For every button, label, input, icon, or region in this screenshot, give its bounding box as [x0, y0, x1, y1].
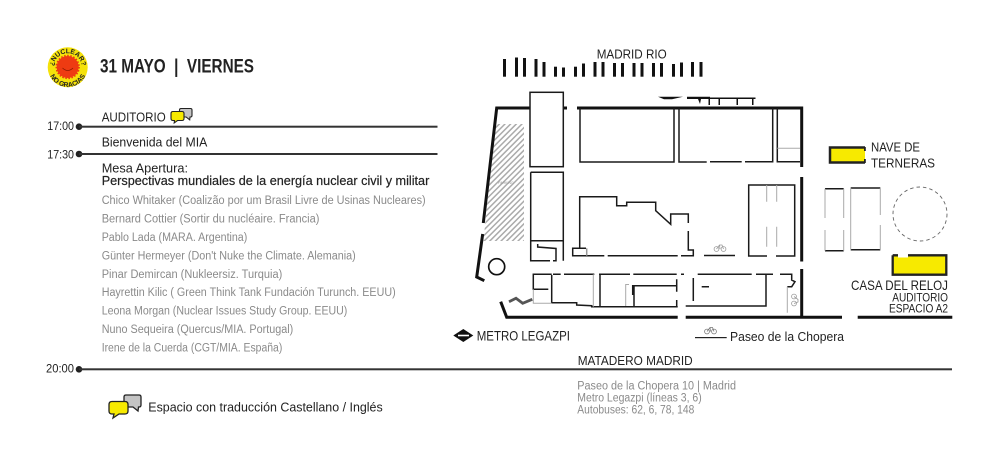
- logo: nuclear no gracias: [48, 47, 88, 88]
- icon: bicycle legend: [705, 328, 716, 334]
- logo: nuclear no gracias: ¿NUCLEAR?: [50, 48, 86, 66]
- logo: nuclear no gracias: NO GRACIAS: [50, 74, 85, 88]
- line: 17:00: [47, 121, 438, 133]
- icon: bicycle east: [792, 294, 798, 306]
- north buildings: [530, 92, 800, 261]
- icon: bicycle north: [714, 245, 726, 251]
- speakers list: [102, 195, 426, 354]
- speakers list: Leona Morgan (Nuclear Issues Study Group. EEUU): [102, 306, 347, 318]
- venue: casa del reloj: CASA DEL RELOJ: [851, 277, 948, 293]
- paseo de la chopera label: [695, 328, 845, 344]
- stairs: [509, 298, 532, 303]
- icon: translation speech bubbles: [171, 108, 192, 123]
- line: 20:00: 20:00: [46, 364, 74, 376]
- map label: madrid rio: MADRID RIO: [597, 46, 667, 61]
- roof details: [658, 97, 756, 105]
- session: mesa apertura: Mesa Apertura:: [102, 160, 188, 175]
- metro label: [453, 328, 570, 344]
- round structure: [489, 259, 505, 275]
- session: bienvenida: Bienvenida del MIA: [102, 135, 208, 150]
- east small buildings: [825, 188, 880, 251]
- icon: metro diamond: [453, 329, 473, 342]
- line: 17:00: 17:00: [47, 121, 74, 133]
- parking area: [484, 124, 524, 241]
- venue: nave de terneras: [830, 140, 935, 170]
- trees row: [503, 58, 702, 77]
- speakers list: Hayrettin Kilic ( Green Think Tank Fundación Turunch. EEUU): [102, 287, 396, 299]
- session: mesa apertura: Perspectivas mundiales de la energía nuclear civil y militar: [102, 173, 430, 188]
- speakers list: Chico Whitaker (Coalizão por um Brasil Livre de Usinas Nucleares): [102, 195, 426, 207]
- speakers list: Pinar Demircan (Nukleersiz. Turquia): [102, 269, 282, 281]
- venue: casa del reloj: [851, 254, 948, 316]
- address block: [577, 380, 736, 416]
- title: 31 MAYO | VIERNES: [100, 57, 254, 78]
- schedule timeline: [46, 108, 952, 376]
- legend: translation: [109, 395, 383, 418]
- venue: nave de terneras: NAVE DE: [871, 140, 920, 155]
- icon: legend speech bubbles: [109, 395, 141, 418]
- venue heading: MATADERO MADRID: [578, 353, 693, 368]
- venue: casa del reloj: AUDITORIO: [892, 291, 948, 305]
- line: 20:00: [46, 364, 952, 376]
- speakers list: Günter Hermeyer (Don't Nuke the Climate. Alemania): [102, 250, 356, 262]
- session: mesa apertura: [102, 160, 430, 188]
- legend: translation: Espacio con traducción Castellano / Inglés: [148, 401, 383, 415]
- east hall: [749, 185, 795, 256]
- south buildings: [533, 274, 795, 307]
- paseo de la chopera label: Paseo de la Chopera: [730, 329, 845, 344]
- speakers list: Irene de la Cuerda (CGT/MIA. España): [102, 342, 282, 354]
- map: matadero site plan: [477, 92, 952, 317]
- line: 17:30: [47, 149, 438, 161]
- address block: Paseo de la Chopera 10 | Madrid: [577, 380, 736, 392]
- speakers list: Pablo Lada (MARA. Argentina): [102, 232, 247, 244]
- venue: nave de terneras: TERNERAS: [871, 155, 935, 170]
- address block: Autobuses: 62, 6, 78, 148: [577, 404, 694, 416]
- speakers list: Bernard Cottier (Sortir du nucléaire. Francia): [102, 214, 320, 226]
- metro label: METRO LEGAZPI: [477, 328, 570, 344]
- speakers list: Nuno Sequeira (Quercus/MIA. Portugal): [102, 324, 293, 336]
- parking area: PARKING: [498, 181, 514, 185]
- address block: Metro Legazpi (líneas 3, 6): [577, 393, 702, 405]
- venue: casa del reloj: ESPACIO A2: [889, 302, 948, 316]
- central nave: [573, 197, 735, 256]
- dashed circle: [893, 187, 947, 241]
- outer walls: [477, 108, 952, 317]
- heading: auditorio: AUDITORIO: [102, 110, 166, 125]
- line: 17:30: 17:30: [47, 149, 74, 161]
